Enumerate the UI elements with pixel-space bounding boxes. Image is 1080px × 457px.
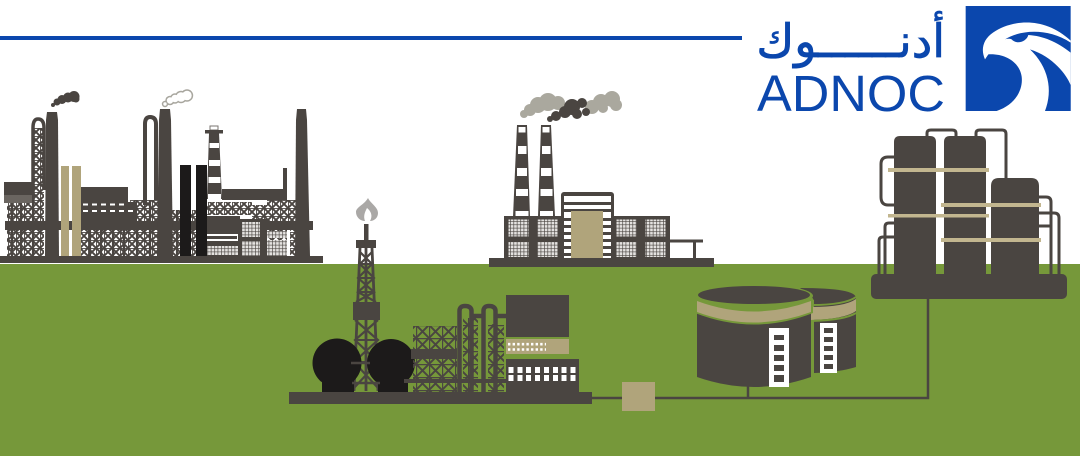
small tank	[800, 288, 856, 373]
arched pipes	[460, 306, 506, 392]
side platform	[670, 241, 703, 258]
flame	[356, 198, 378, 221]
ground	[0, 264, 1080, 456]
column 2	[944, 136, 986, 274]
pipeline	[592, 298, 928, 398]
central hall	[561, 192, 614, 258]
black spherical tanks	[312, 338, 415, 392]
ladder	[769, 328, 789, 387]
ADNOC logo	[756, 6, 1071, 122]
arched pipes	[33, 119, 44, 200]
tan block with dots	[506, 339, 569, 354]
logo emblem: falcon	[966, 6, 1071, 111]
chimneys	[45, 112, 59, 256]
lattice block	[404, 318, 506, 392]
upper block	[506, 295, 569, 337]
smoke: dark	[51, 91, 80, 107]
tan junction box	[622, 382, 655, 411]
main building	[504, 216, 670, 258]
chimneys	[513, 125, 555, 217]
ladder	[820, 323, 837, 373]
lattice column posts	[12, 195, 177, 256]
tan columns	[61, 166, 69, 256]
smoke: outlined white	[162, 89, 193, 107]
lower right units	[207, 216, 287, 256]
column 1	[894, 136, 936, 274]
refinery (left)	[0, 89, 323, 263]
lattice structures	[7, 128, 296, 256]
dark block with windows	[506, 359, 579, 392]
dark blocks	[4, 182, 32, 195]
plant base	[489, 258, 714, 267]
header rule	[0, 36, 742, 40]
smoke	[520, 91, 622, 122]
distillation columns	[871, 130, 1067, 299]
connecting pipes	[879, 130, 1059, 274]
striped stack	[205, 126, 223, 199]
column 3	[991, 178, 1039, 274]
power plant (centre)	[489, 91, 714, 267]
logo wordmark ADNOC: ADNOC	[757, 65, 945, 122]
column base	[871, 274, 1067, 299]
large tank	[695, 284, 813, 387]
derrick	[353, 224, 380, 391]
storage tanks	[695, 284, 856, 387]
black columns	[180, 165, 191, 256]
drilling and processing site	[289, 198, 592, 404]
beam	[5, 221, 313, 230]
tan bands	[888, 168, 1041, 242]
logo wordmark Arabic: أدنــــــوك	[756, 11, 945, 69]
refinery base	[0, 256, 323, 263]
site base	[289, 392, 592, 404]
